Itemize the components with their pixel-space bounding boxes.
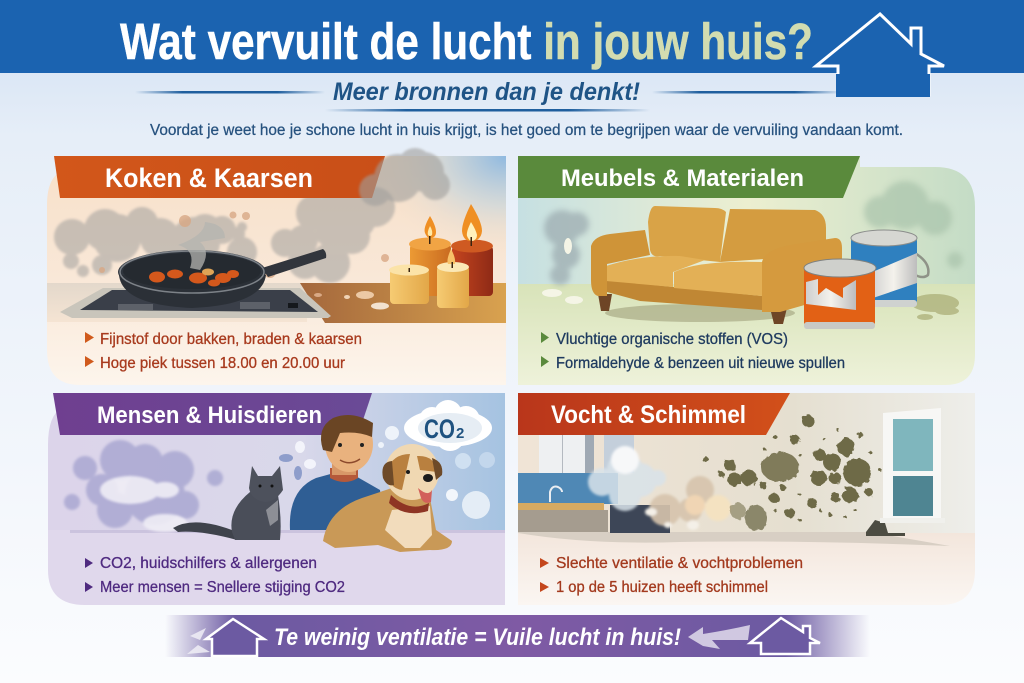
- icon: left air swoosh: [187, 628, 210, 654]
- countertop and wood: [47, 283, 506, 323]
- bullets: Meubels & Materialen: [541, 331, 845, 372]
- footer text: Te weinig ventilatie = Vuile lucht in huis!: [274, 624, 681, 651]
- smoke clouds: [53, 187, 396, 284]
- stove: [60, 288, 331, 318]
- footer banner: [165, 615, 870, 657]
- icon: right house: [750, 618, 820, 654]
- bullets: Vocht & Schimmel: Slechte ventilatie & vochtproblemen: [556, 555, 803, 572]
- cat: [173, 466, 283, 540]
- CO2 cloud: [404, 400, 492, 451]
- bullets: Mensen & Huisdieren: CO2, huidschilfers & allergenen: [100, 555, 317, 572]
- panel: Koken & Kaarsen: [47, 148, 506, 385]
- sofa: [591, 206, 842, 324]
- smoke: rising over ribbon: [359, 148, 450, 206]
- header band: [0, 0, 1024, 73]
- fried food: [149, 268, 239, 286]
- smoke particles: [99, 212, 389, 278]
- bullets: Vocht & Schimmel: [540, 555, 803, 596]
- bullets: Meubels & Materialen: Formaldehyde & benzeen uit nieuwe spullen: [556, 355, 845, 372]
- dog: [323, 444, 452, 552]
- paint can blue: [851, 230, 928, 307]
- intro text: Voordat je weet hoe je schone lucht in huis krijgt, is het goed om te begrijpen waar de vervuiling vandaan komt.: [150, 122, 903, 139]
- man: [290, 415, 385, 530]
- ribbon: Vocht & Schimmel: Vocht & Schimmel: [551, 401, 746, 429]
- subtitle: Meer bronnen dan je denkt!: [333, 78, 640, 106]
- CO2 cloud: CO: [424, 414, 455, 444]
- panel: Mensen & Huisdieren: [48, 393, 505, 605]
- title: Wat vervuilt de lucht in jouw huis?: [120, 13, 813, 70]
- bullets: Koken & Kaarsen: Hoge piek tussen 18.00 en 20.00 uur: [100, 355, 345, 372]
- bullets: Mensen & Huisdieren: [85, 555, 345, 596]
- floor mold: [866, 520, 905, 536]
- bullets: Koken & Kaarsen: [85, 331, 362, 372]
- icon: right arrow: [688, 625, 750, 649]
- ribbon: Koken & Kaarsen: [54, 156, 385, 198]
- candles: [389, 204, 493, 308]
- icon: header house: [816, 14, 944, 97]
- ribbon: Vocht & Schimmel: [518, 393, 790, 435]
- allergen cloud: [64, 440, 223, 532]
- frying pan: [118, 222, 326, 308]
- bullets: Meubels & Materialen: Vluchtige organische stoffen (VOS): [556, 331, 788, 348]
- kitchen: [518, 435, 670, 533]
- ribbon: Meubels & Materialen: [518, 156, 860, 198]
- steam cloud: [588, 446, 731, 530]
- CO2 cloud: 2: [456, 425, 464, 442]
- steam: [178, 222, 225, 270]
- ribbon: Meubels & Materialen: Meubels & Materialen: [561, 165, 804, 192]
- bullets: Koken & Kaarsen: Fijnstof door bakken, braden & kaarsen: [100, 331, 362, 348]
- floating particles: [279, 426, 495, 519]
- ribbon: Koken & Kaarsen: Koken & Kaarsen: [105, 163, 313, 193]
- floor stains: [911, 294, 959, 320]
- mold: [702, 415, 882, 531]
- panel: Meubels & Materialen: [518, 156, 975, 385]
- bullets: Mensen & Huisdieren: Meer mensen = Snellere stijging CO2: [100, 579, 345, 596]
- fumes: [544, 181, 963, 285]
- bullets: Vocht & Schimmel: 1 op de 5 huizen heeft schimmel: [556, 579, 768, 596]
- paint can orange: [804, 259, 876, 329]
- ribbon: Mensen & Huisdieren: Mensen & Huisdieren: [97, 402, 322, 429]
- icon: left house: [206, 619, 264, 656]
- ribbon: Mensen & Huisdieren: [53, 393, 372, 435]
- window: [880, 408, 945, 523]
- panel: Vocht & Schimmel: [518, 393, 975, 605]
